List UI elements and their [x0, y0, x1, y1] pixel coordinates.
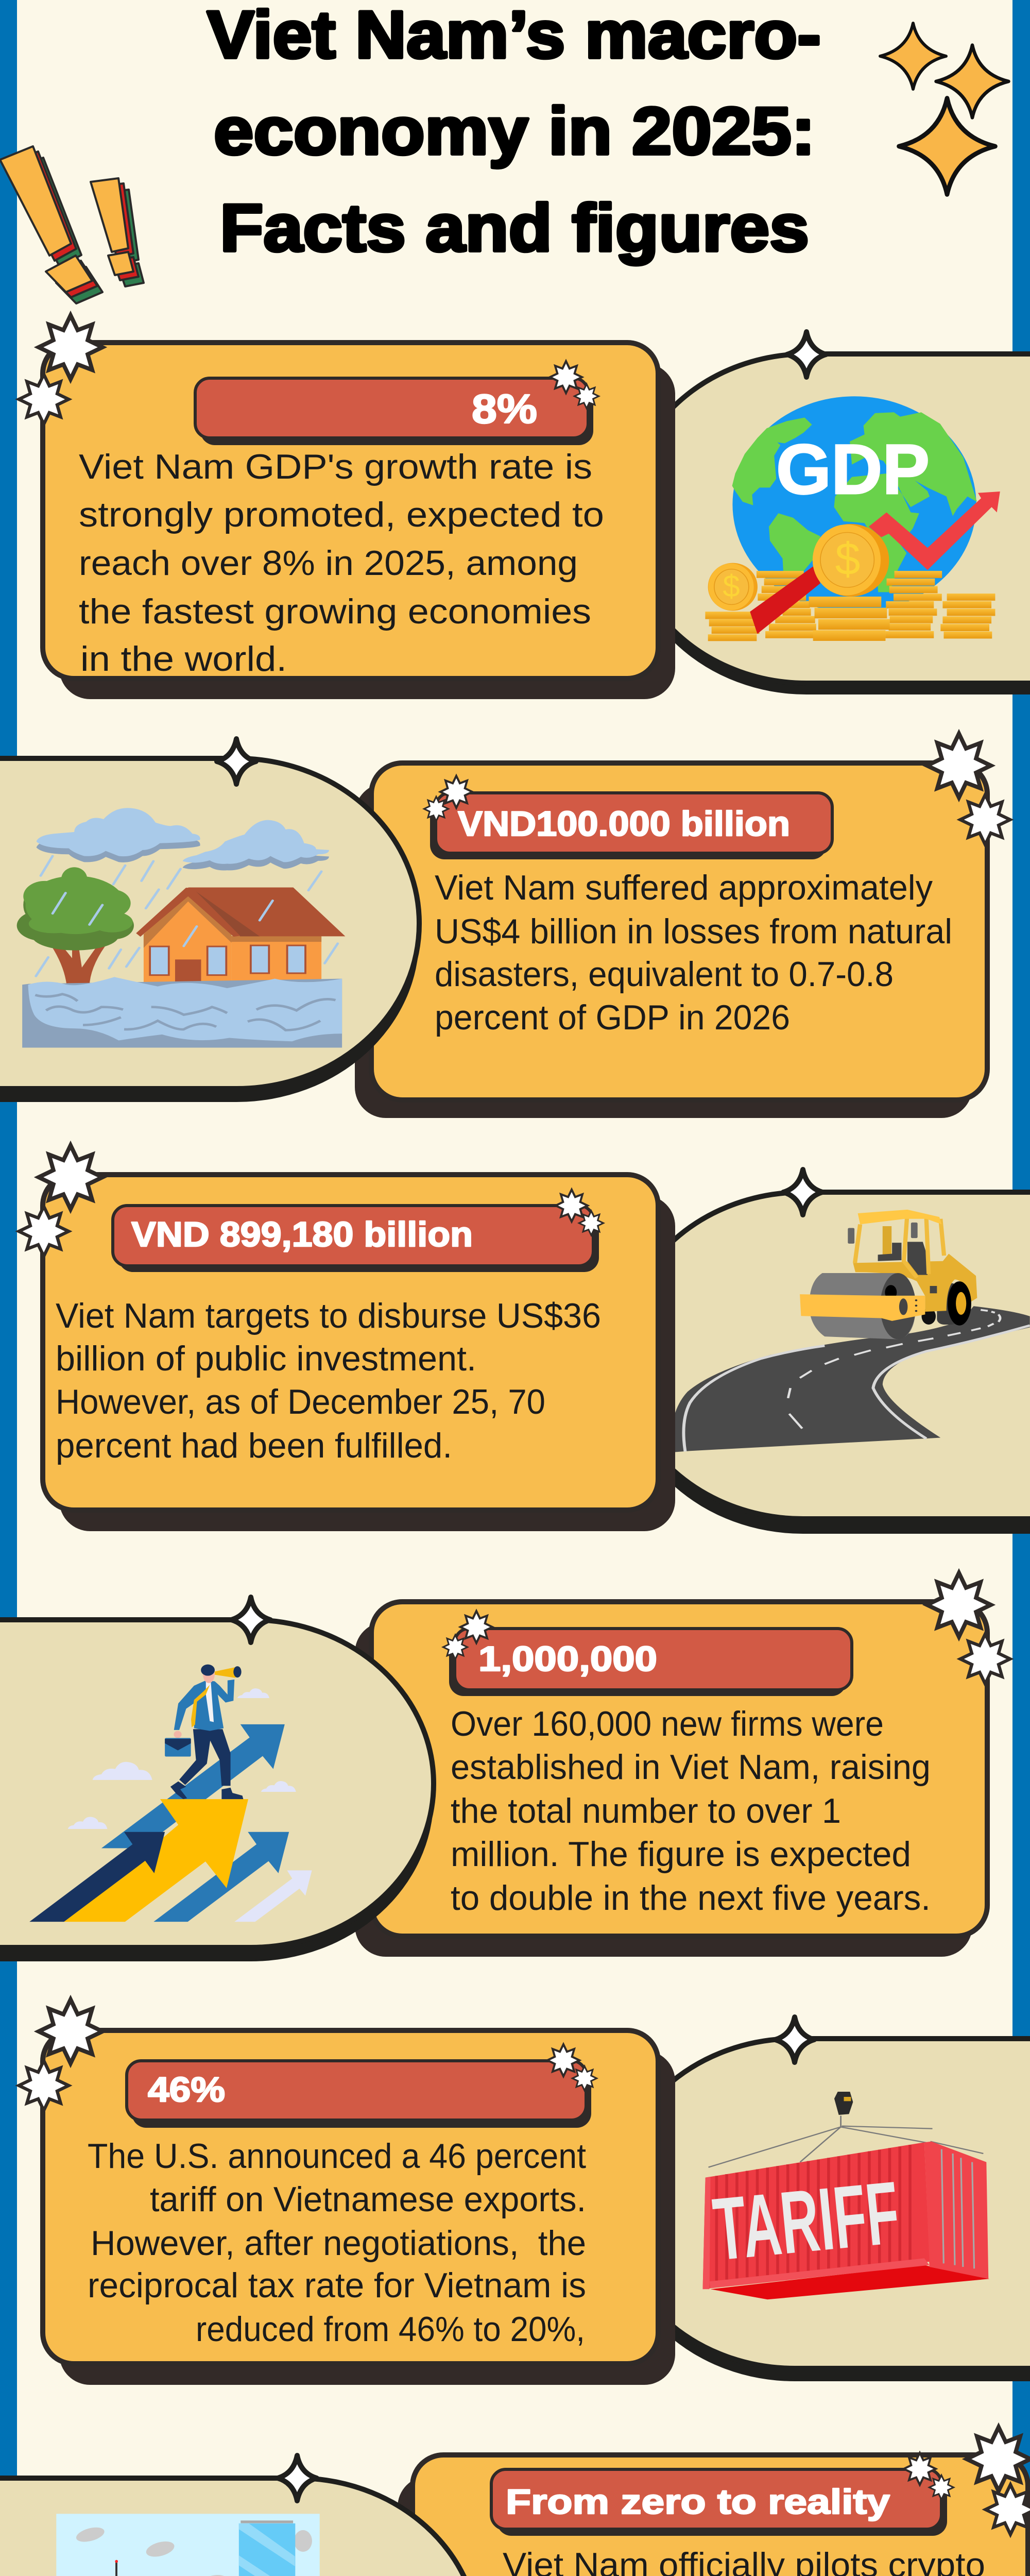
body text: GDP: strongly promoted, expected to	[79, 495, 604, 534]
figure pill: 46%: 46%	[148, 2070, 225, 2109]
body text: investment: Viet Nam targets to disburse US$36	[56, 1296, 601, 1335]
icon: tariff shipping container	[703, 2092, 989, 2299]
body text: GDP: reach over 8% in 2025, among	[79, 544, 578, 583]
icon: businessman on rising arrows	[29, 1665, 312, 1922]
body text: disasters: US$4 billion in losses from natural	[435, 912, 952, 951]
title: economy in 2025:	[214, 93, 815, 168]
icon: road roller on winding road	[671, 1210, 1030, 1452]
body text: firms: established in Viet Nam, raising	[451, 1748, 931, 1787]
image panel: city	[0, 2455, 479, 2576]
image panel: GDP	[625, 332, 1030, 694]
icon: orange sparkles	[880, 23, 1008, 194]
bursts	[904, 2427, 1030, 2534]
image panel: growth arrows	[0, 1597, 434, 1961]
icon: globe with GDP, coins and rising arrow	[705, 396, 1000, 641]
icon: globe with GDP, coins and rising arrow: GDP	[776, 430, 930, 509]
figure pill: VND 899,180 billion	[113, 1206, 599, 1272]
title	[207, 0, 821, 265]
body text: tariff: The U.S. announced a 46 percent	[88, 2137, 586, 2176]
icon: city with tower, bank and glass skyscraper	[56, 2514, 320, 2576]
panel: tariff	[19, 1999, 1030, 2385]
body text: GDP	[79, 447, 604, 679]
card: GDP growth	[19, 315, 675, 699]
panel: natural disasters	[0, 734, 1010, 1118]
figure pill: 46%	[127, 2061, 591, 2128]
body text: tariff: tariff on Vietnamese exports.	[150, 2180, 586, 2219]
figure pill: From zero to reality: From zero to reality	[506, 2482, 890, 2521]
card: public investment	[19, 1145, 675, 1531]
figure pill: 8%: 8%	[472, 386, 537, 432]
icon: exclamation marks	[0, 146, 144, 303]
panel: GDP growth	[19, 315, 1030, 699]
body text: investment: percent had been fulfilled.	[56, 1426, 452, 1465]
card: tariff	[19, 1999, 675, 2385]
body text: disasters: Viet Nam suffered approximately	[435, 868, 933, 907]
figure pill: 1,000,000	[449, 1629, 852, 1696]
body text: investment: billion of public investment.	[56, 1339, 476, 1378]
bursts	[443, 1573, 1010, 1684]
body text: tariff: However, after negotiations, the	[91, 2224, 586, 2263]
body text: firms: the total number to over 1	[451, 1791, 841, 1831]
card: new firms	[355, 1573, 1010, 1957]
icon: globe with GDP, coins and rising arrow: $	[723, 569, 740, 603]
bursts	[19, 315, 599, 424]
body text: disasters: percent of GDP in 2026	[435, 998, 790, 1037]
body text: investment: However, as of December 25, 70	[56, 1382, 545, 1421]
image panel: flood	[0, 739, 419, 1102]
body text: investment	[56, 1296, 601, 1465]
image panel: tariff	[612, 2017, 1030, 2381]
left blue side bar	[0, 0, 17, 2576]
figure pill: 8%	[195, 378, 593, 445]
figure pill: VND 899,180 billion: VND 899,180 billion	[131, 1215, 473, 1254]
body text: firms: Over 160,000 new firms were	[451, 1704, 884, 1743]
body text: GDP: in the world.	[80, 639, 287, 679]
body text: GDP: the fastest growing economies	[79, 592, 591, 631]
body text: disasters: disasters, equivalent to 0.7-0.8	[435, 955, 894, 994]
bursts	[19, 1145, 604, 1256]
image panel: road	[621, 1170, 1030, 1534]
body text: firms	[451, 1704, 931, 1918]
card: natural disasters	[355, 734, 1010, 1118]
body text: GDP: Viet Nam GDP's growth rate is	[79, 447, 592, 486]
bursts	[424, 734, 1010, 844]
body text: disasters	[435, 868, 952, 1037]
body text: firms: to double in the next five years.	[451, 1878, 931, 1918]
icon: flooded house in the rain	[17, 808, 345, 1048]
figure pill: 1,000,000: 1,000,000	[478, 1639, 657, 1679]
figure pill: From zero to reality	[491, 2469, 947, 2536]
panel: from zero to reality	[0, 2427, 1030, 2576]
icon: globe with GDP, coins and rising arrow: $	[835, 533, 860, 584]
icon: tariff shipping container: TARIFF	[709, 2163, 903, 2279]
right blue side bar	[1012, 0, 1030, 2576]
title: Facts and figures	[220, 190, 809, 265]
bursts	[19, 1999, 597, 2110]
card: from zero to reality	[398, 2427, 1030, 2576]
body text: firms: million. The figure is expected	[451, 1835, 911, 1874]
body text: tariff: reduced from 46% to 20%,	[196, 2310, 585, 2349]
figure pill: VND100.000 billion: VND100.000 billion	[458, 804, 790, 843]
panel: new firms	[0, 1573, 1010, 1961]
panel: public investment	[19, 1145, 1030, 1534]
body text: tariff: reciprocal tax rate for Vietnam is	[88, 2266, 586, 2305]
body text: tariff	[88, 2137, 586, 2349]
figure pill: VND100.000 billion	[430, 793, 832, 859]
